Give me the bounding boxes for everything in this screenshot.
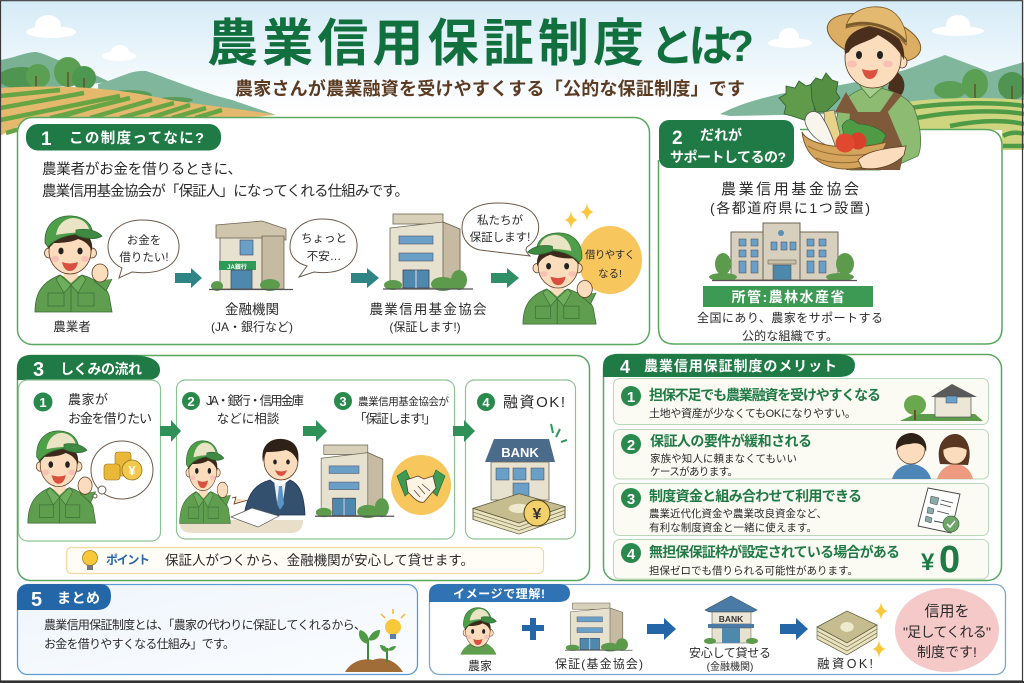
building: [565, 603, 632, 652]
speech bubble: bank: [290, 219, 357, 277]
arrow: [303, 420, 327, 442]
yen zero: ¥: [921, 549, 935, 576]
farmer: [35, 216, 112, 312]
merit 4: 無担保保証枠が設定されている場合がある: [649, 544, 900, 560]
yen zero: [921, 539, 960, 581]
merit 3: 有利な制度資金と一緒に使えます。: [649, 521, 817, 534]
image heading: [429, 584, 570, 602]
step 2 and 3 box: JA・銀行・信用金庫: [206, 393, 304, 408]
intro text: 農業者がお金を借りるときに、: [42, 161, 242, 178]
title: 農業信用保証制度: [207, 15, 644, 72]
step 1 box: [18, 380, 160, 541]
merit 1: [614, 378, 988, 424]
subtitle: 農家さんが農業融資を受けやすくする「公的な保証制度」です: [235, 78, 745, 99]
step 2 and 3 box: 「保証します!」: [354, 412, 436, 426]
heading 4: 農業信用保証制度のメリット: [644, 358, 837, 374]
labels: 農業信用基金協会: [370, 301, 487, 317]
point callout: [66, 548, 544, 574]
description: 公的な組織です。: [742, 328, 838, 343]
panel 1: what is the system: [18, 118, 650, 344]
merit 3: 制度資金と組み合わせて利用できる: [649, 488, 862, 504]
merit 2: ケースがあります。: [650, 465, 738, 478]
heading 5: [17, 584, 111, 611]
merit 2: [614, 430, 988, 479]
thought bubble with coins: ¥: [128, 463, 136, 478]
landscape: left farmland: [0, 52, 276, 136]
merit 2: 家族や知人に頼まなくてもいい: [650, 452, 797, 465]
image heading: イメージで理解!: [453, 586, 545, 601]
heading 2: [659, 120, 794, 168]
merit 3: [614, 484, 988, 536]
label bank: [689, 645, 771, 673]
label farmer: 農家: [468, 659, 492, 673]
speech bubble: farmer: [108, 220, 179, 278]
bank: [704, 596, 758, 644]
merit 2: 2: [627, 437, 635, 454]
merit 2: 保証人の要件が緩和される: [650, 433, 812, 449]
intro text: 農業信用基金協会が「保証人」になってくれる仕組みです。: [42, 183, 409, 200]
organization name: [710, 181, 870, 216]
happy farmer: [523, 233, 596, 324]
panel 4: merits: [603, 354, 1002, 581]
arrow: [351, 268, 379, 288]
merit 3: 農業近代化資金や農業改良資金など、: [649, 507, 827, 520]
speech bubble: association: 保証します!: [470, 230, 530, 244]
step 1 box: 農家が: [68, 392, 108, 407]
plus sign: [522, 618, 544, 640]
step 4 box: [466, 380, 576, 539]
heading 1: [26, 124, 221, 150]
handshake badge: [391, 455, 451, 515]
merit 4: 4: [627, 546, 636, 563]
sparkles: [564, 203, 594, 229]
step 2 and 3 box: 農業信用基金協会が: [358, 395, 450, 408]
icon: sprout and bulb: [345, 609, 405, 672]
ministry bar: 所管:農林水産省: [732, 289, 844, 305]
bank with money: ¥: [533, 506, 542, 523]
panel 3: flow: [17, 355, 590, 580]
speech bubble: bank: ちょっと: [301, 232, 347, 245]
step 4 box: 4: [482, 395, 490, 410]
arrow: [780, 618, 808, 640]
icon: checklist: [918, 488, 960, 533]
labels: 金融機関: [225, 302, 279, 317]
pink callout: 信用を: [924, 603, 970, 620]
pink callout: 制度です!: [917, 644, 977, 660]
heading 3: [17, 355, 160, 381]
step 2 and 3 box: などに相談: [217, 412, 280, 426]
arrow: [647, 618, 676, 640]
bank building: [209, 221, 293, 291]
merit 3: 3: [627, 491, 635, 508]
label loan ok: 融資OK!: [817, 657, 873, 671]
farmer head: [460, 608, 496, 655]
labels: (JA・銀行など): [211, 320, 293, 334]
government building: [709, 223, 857, 281]
step 2 and 3 box: [176, 380, 454, 539]
label guarantee: 保証(基金協会): [555, 656, 643, 671]
panel: image summary: [429, 584, 1006, 674]
speech bubble: association: [462, 203, 539, 256]
heading 2: サポートしてるの?: [670, 149, 786, 165]
intro text: [42, 161, 409, 200]
yellow badge: 借りやすく: [585, 249, 635, 261]
heading 1: 1: [41, 129, 52, 150]
heading 3: 3: [33, 359, 44, 381]
organization name: 農業信用基金協会: [721, 181, 859, 198]
bank with money: [473, 424, 567, 534]
merit 4: [614, 539, 988, 581]
speech bubble: farmer: 借りたい!: [119, 251, 169, 264]
money: [817, 611, 877, 655]
landscape: right farmland: [720, 55, 1024, 150]
thought bubble with coins: [91, 441, 153, 499]
panel 2: who supports: [658, 120, 1002, 344]
speech bubble: bank: 不安…: [307, 250, 341, 263]
pink callout: "足してくれる": [903, 624, 991, 640]
heading 5: まとめ: [57, 590, 100, 606]
arrow: [453, 420, 475, 442]
step 1 box: お金を借りたい: [68, 411, 152, 426]
merit 4: 担保ゼロでも借りられる可能性があります。: [649, 564, 858, 577]
heading 4: 4: [620, 357, 630, 377]
summary text: [44, 618, 366, 651]
yellow badge: なる!: [598, 268, 622, 280]
merit 1: 担保不足でも農業融資を受けやすくなる: [649, 387, 881, 403]
title: とは?: [650, 22, 754, 71]
labels: [53, 301, 487, 334]
heading 4: [603, 354, 855, 377]
farmer woman with vegetable basket: [779, 4, 926, 170]
ministry bar: [703, 286, 873, 307]
point callout: ポイント: [106, 553, 150, 567]
sparkles: [872, 602, 888, 658]
arrow: [491, 268, 519, 288]
bank building: JA銀行: [227, 263, 247, 271]
speech bubble: farmer: お金を: [127, 234, 161, 247]
organization name: (各都道府県に1つ設置): [710, 200, 870, 216]
heading 5: 5: [31, 589, 42, 611]
description: 全国にあり、農家をサポートする: [697, 311, 883, 325]
background sky: [0, 0, 1024, 110]
step 2 and 3 box: 3: [339, 394, 347, 409]
speech bubble: association: 私たちが: [477, 213, 523, 227]
yellow badge: [578, 226, 642, 294]
icon: light bulb: [82, 550, 98, 570]
heading 2: 2: [672, 128, 683, 149]
icon: two people: [892, 433, 973, 479]
bank with money: BANK: [501, 445, 539, 460]
clouds: [26, 15, 984, 61]
labels: (保証します!): [389, 320, 461, 334]
consultation scene: [179, 439, 305, 533]
heading 3: しくみの流れ: [60, 361, 142, 377]
summary text: 農業信用保証制度とは、「農家の代わりに保証してくれるから、: [44, 618, 366, 632]
arrow: [175, 268, 202, 288]
merit 1: 1: [627, 389, 635, 406]
arrow: [160, 420, 181, 442]
point callout: 保証人がつくから、金融機関が安心して貸せます。: [165, 553, 474, 568]
guarantee association building: [383, 214, 473, 291]
heading 2: だれが: [700, 127, 742, 143]
labels: 農業者: [53, 319, 91, 334]
heading 1: この制度ってなに?: [69, 129, 204, 147]
yen zero: 0: [939, 539, 960, 581]
panel 5: summary: [17, 584, 418, 674]
step 1 box: 1: [39, 395, 47, 410]
description: [697, 311, 883, 343]
label bank: (金融機関): [707, 660, 753, 673]
summary text: お金を借りやすくなる仕組み」です。: [44, 637, 235, 651]
icon: house: [900, 384, 983, 421]
pink callout: [895, 588, 999, 672]
step 2 and 3 box: 2: [187, 394, 195, 409]
bank: BANK: [719, 614, 744, 624]
label bank: 安心して貸せる: [689, 645, 771, 660]
merit 1: 土地や資産が少なくてもOKになりやすい。: [649, 406, 856, 420]
step 4 box: 融資OK!: [503, 394, 565, 411]
